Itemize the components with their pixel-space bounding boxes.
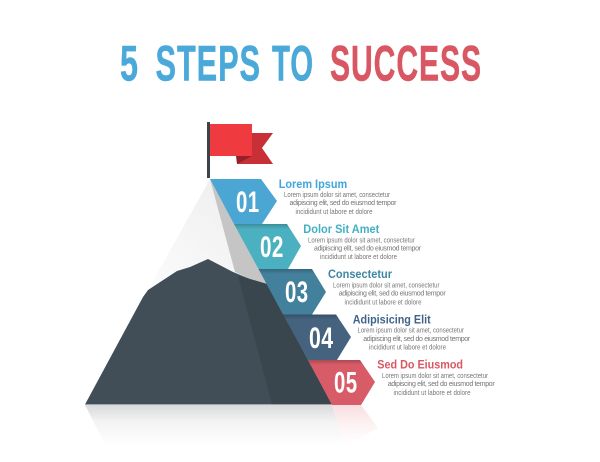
number 05: 05 — [334, 367, 358, 400]
number 03: 03 — [285, 276, 308, 309]
title: 5 — [120, 36, 139, 92]
arrow 04 — [283, 314, 351, 360]
heading 03: Consectetur — [328, 267, 392, 281]
step 01 — [210, 177, 397, 224]
heading 05: Sed Do Eiusmod — [377, 358, 463, 372]
arrow 02 — [234, 224, 301, 269]
text 02: incididunt ut labore et dolore — [320, 254, 397, 261]
flag — [207, 122, 273, 178]
text 03: adipiscing elit, sed do eiusmod tempor — [339, 290, 446, 298]
title: TO — [272, 36, 314, 92]
arrow 03 — [258, 269, 326, 314]
text 05: incididunt ut labore et dolore — [394, 390, 471, 397]
arrow 01 — [210, 179, 277, 224]
heading 02: Dolor Sit Amet — [303, 222, 379, 236]
title — [120, 36, 482, 92]
text 02: Lorem ipsum dolor sit amet, consectetur — [308, 237, 415, 244]
flag fold — [236, 156, 252, 164]
flag back ribbon — [237, 133, 273, 164]
text 01: Lorem ipsum dolor sit amet, consectetur — [284, 192, 391, 199]
heading 04: Adipisicing Elit — [353, 312, 431, 326]
text 03: incididunt ut labore et dolore — [344, 299, 422, 306]
arrow 05 — [308, 360, 375, 405]
number 02: 02 — [260, 231, 284, 264]
flag pole — [207, 122, 210, 178]
text 01: incididunt ut labore et dolore — [296, 209, 373, 216]
text 03 — [333, 282, 446, 306]
flag front — [210, 124, 252, 156]
mountain reflection — [85, 405, 378, 446]
text 02: adipiscing elit, sed do eiusmod tempor — [314, 245, 422, 252]
text 04: Lorem ipsum dolor sit amet, consectetur — [358, 328, 465, 335]
mountain body — [85, 259, 332, 404]
step 02 — [234, 222, 422, 269]
text 04 — [358, 328, 471, 352]
number 04: 04 — [309, 322, 334, 355]
title: STEPS — [156, 36, 261, 92]
mountain snow cap — [148, 179, 267, 290]
number 01: 01 — [236, 186, 260, 219]
step 03 — [258, 267, 446, 314]
step 05 — [308, 358, 495, 405]
text 01 — [284, 192, 397, 216]
text 03: Lorem ipsum dolor sit amet, consectetur — [333, 282, 440, 290]
heading 01: Lorem Ipsum — [279, 177, 347, 191]
text 02 — [308, 237, 422, 261]
text 01: adipiscing elit, sed do eiusmod tempor — [290, 200, 397, 207]
title: SUCCESS — [330, 36, 482, 92]
text 04: incididunt ut labore et dolore — [369, 345, 446, 352]
text 05: adipiscing elit, sed do eiusmod tempor — [388, 381, 495, 388]
text 05: Lorem ipsum dolor sit amet, consectetur — [382, 373, 489, 380]
step 04 — [283, 312, 471, 360]
text 04: adipiscing elit, sed do eiusmod tempor — [363, 336, 471, 343]
text 05 — [382, 373, 495, 397]
